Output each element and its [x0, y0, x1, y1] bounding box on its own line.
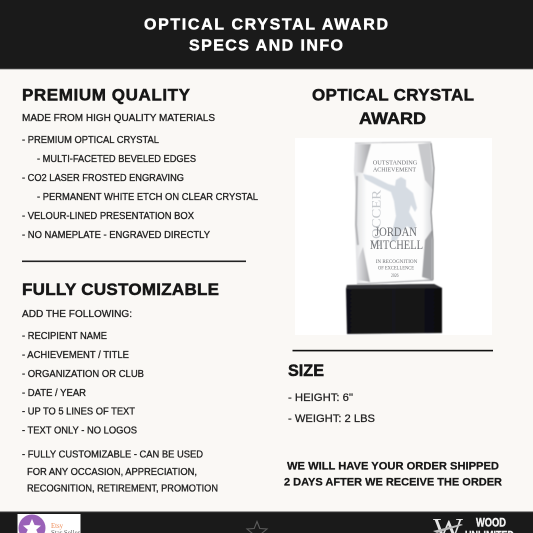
premium quality list: - PERMANENT WHITE ETCH ON CLEAR CRYSTAL [37, 192, 258, 203]
premium quality list: - PREMIUM OPTICAL CRYSTAL [22, 135, 159, 146]
etched text [370, 160, 423, 279]
premium quality list: - CO2 LASER FROSTED ENGRAVING [22, 173, 184, 184]
heading: fully customizable: FULLY CUSTOMIZABLE [22, 280, 219, 299]
etched text: SOCCER [370, 189, 384, 247]
header title [144, 16, 388, 54]
logo: wood wordmark [433, 513, 514, 533]
etched text: MITCHELL [370, 238, 423, 252]
customization list: - UP TO 5 LINES OF TEXT [22, 407, 135, 418]
premium quality list: - NO NAMEPLATE - ENGRAVED DIRECTLY [22, 230, 210, 241]
footer band [0, 512, 533, 533]
size list [288, 392, 375, 425]
panel: premium quality [22, 85, 258, 241]
usage note: FOR ANY OCCASION, APPRECIATION, [27, 467, 197, 478]
header band [0, 0, 533, 69]
product photo: crystal award [295, 138, 492, 335]
size list: - WEIGHT: 2 LBS [288, 413, 375, 425]
header title: SPECS AND INFO [189, 37, 343, 54]
etched soccer player [363, 174, 417, 242]
panel: fully customizable [22, 280, 219, 494]
header title: OPTICAL CRYSTAL AWARD [144, 16, 388, 33]
logo: wood wordmark: WOOD [476, 518, 506, 530]
premium quality list [22, 113, 258, 241]
customization list: - ORGANIZATION OR CLUB [22, 369, 144, 380]
badge: etsy star seller [18, 514, 80, 533]
customization list: - TEXT ONLY - NO LOGOS [22, 426, 137, 437]
panel: size [288, 361, 375, 425]
size list: - HEIGHT: 6" [288, 392, 353, 404]
heading: optical crystal award: OPTICAL CRYSTAL [312, 85, 474, 104]
heading: optical crystal award: AWARD [359, 109, 426, 128]
premium quality list: - MULTI-FACETED BEVELED EDGES [37, 154, 196, 165]
customization list: - RECIPIENT NAME [22, 331, 107, 342]
shipping note: 2 DAYS AFTER WE RECEIVE THE ORDER [284, 476, 502, 488]
crystal block [354, 142, 434, 284]
etched text: ACHIEVEMENT [373, 166, 416, 173]
etched text: OUTSTANDING [373, 160, 418, 167]
icon: outline star [247, 522, 267, 533]
shipping note: WE WILL HAVE YOUR ORDER SHIPPED [287, 461, 499, 473]
premium quality list: MADE FROM HIGH QUALITY MATERIALS [22, 113, 215, 124]
etched text: 2026 [391, 273, 399, 279]
usage note: RECOGNITION, RETIREMENT, PROMOTION [27, 484, 218, 494]
usage note: - FULLY CUSTOMIZABLE - CAN BE USED [22, 450, 203, 460]
customization list: ADD THE FOLLOWING: [22, 309, 132, 320]
badge: etsy star seller: Etsy [51, 522, 63, 530]
customization list: - DATE / YEAR [22, 388, 86, 399]
premium quality list: - VELOUR-LINED PRESENTATION BOX [22, 211, 194, 222]
shipping note [284, 461, 502, 488]
etched text: JORDAN [375, 225, 417, 239]
heading: size: SIZE [288, 361, 324, 380]
heading: optical crystal award [312, 85, 474, 128]
customization list [22, 309, 144, 437]
usage note [22, 450, 218, 494]
etched text: IN RECOGNITION [376, 259, 417, 265]
black base [346, 284, 442, 334]
etched text: OF EXCELLENCE [378, 266, 415, 272]
customization list: - ACHIEVEMENT / TITLE [22, 350, 129, 361]
heading: premium quality: PREMIUM QUALITY [22, 85, 191, 104]
